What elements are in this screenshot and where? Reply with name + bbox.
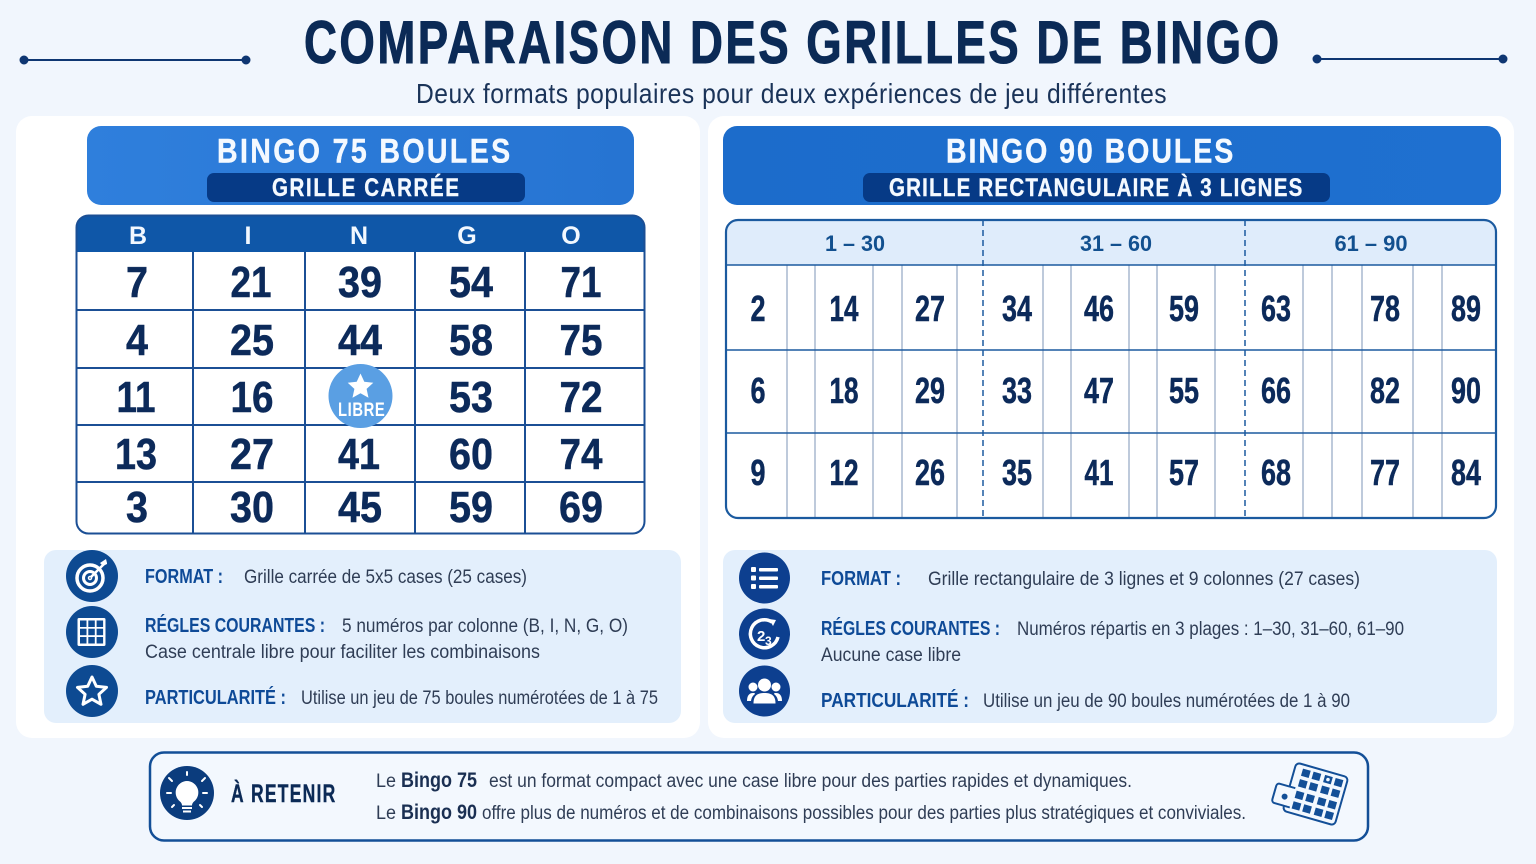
bingo 90 grid: 84	[1451, 452, 1481, 493]
takeaway text: est un format compact avec une case libre pour des parties rapides et dynamiques.	[489, 771, 1132, 792]
bingo 75 grid: 44	[338, 316, 382, 365]
feature text: Utilise un jeu de 75 boules numérotées de 1 à 75	[301, 688, 658, 709]
subtitle: Deux formats populaires pour deux expériences de jeu différentes	[416, 78, 1167, 109]
bingo 90 grid: 63	[1261, 288, 1291, 329]
bingo 90 grid: 55	[1169, 370, 1199, 411]
rules text: RÉGLES COURANTES :	[145, 614, 325, 637]
bingo 75 grid: O	[561, 222, 581, 250]
bingo 75 grid	[76, 215, 645, 534]
header: bingo 75	[87, 126, 634, 205]
bingo 90 grid: 31 – 60	[1080, 231, 1152, 256]
bingo 90 grid: 18	[830, 370, 858, 411]
icon: people	[739, 666, 790, 716]
bingo 75 grid: 21	[230, 258, 272, 307]
free space: LIBRE	[338, 399, 385, 420]
bingo 90 grid: 26	[915, 452, 945, 493]
icon: list	[739, 552, 790, 604]
bingo 90 grid: 90	[1451, 370, 1481, 411]
bingo 75 grid: 74	[560, 430, 603, 479]
rules text: RÉGLES COURANTES :	[821, 617, 1000, 640]
bingo 75 grid: 30	[230, 483, 274, 532]
bingo 75 grid: 41	[338, 430, 380, 479]
takeaway text: Bingo 90	[401, 801, 477, 824]
panel: bingo 90	[708, 116, 1514, 738]
bingo 90 grid: 14	[830, 288, 858, 329]
bingo 90 grid: 78	[1370, 288, 1400, 329]
bingo 75 grid: 54	[449, 258, 493, 307]
rules text: Case centrale libre pour faciliter les combinaisons	[145, 642, 540, 663]
panel: bingo 75	[16, 116, 700, 738]
bingo 75 grid: 4	[126, 316, 148, 365]
bingo 75 grid: 60	[449, 430, 493, 479]
bingo 90 grid	[726, 220, 1496, 518]
icon: rotating numbers: 2	[757, 628, 765, 645]
bingo 90 grid: 77	[1370, 452, 1400, 493]
bingo 75 grid: 39	[338, 258, 382, 307]
bingo 90 grid: 61 – 90	[1334, 231, 1408, 256]
rules text: 5 numéros par colonne (B, I, N, G, O)	[342, 616, 628, 637]
bingo 75 grid: N	[350, 222, 368, 250]
takeaway text	[376, 769, 1246, 824]
rules text	[145, 614, 628, 663]
bingo 90 grid: 47	[1084, 370, 1114, 411]
bingo 75 grid: G	[457, 222, 477, 250]
bingo 75 grid: 59	[449, 483, 493, 532]
takeaway text: Bingo 75	[401, 769, 477, 792]
bingo 90 grid: 89	[1451, 288, 1481, 329]
bingo 90 grid: 2	[750, 288, 766, 329]
header: bingo 75: GRILLE CARRÉE	[272, 173, 459, 201]
bingo 90 grid: 41	[1084, 452, 1114, 493]
takeaway text: offre plus de numéros et de combinaisons possibles pour des parties plus stratégiques et conviviales.	[482, 803, 1246, 824]
bingo 90 grid: 59	[1169, 288, 1199, 329]
format text: FORMAT :	[821, 568, 901, 590]
bingo 75 grid: 69	[559, 483, 603, 532]
header: bingo 90	[723, 126, 1501, 205]
bingo 90 grid: 66	[1261, 370, 1291, 411]
bingo 75 grid: 27	[230, 430, 274, 479]
icon: bingo ticket	[1270, 759, 1348, 825]
left title rule	[20, 56, 250, 64]
rules text: Numéros répartis en 3 plages : 1–30, 31–60, 61–90	[1017, 619, 1404, 640]
bingo 75 grid: B	[129, 222, 147, 250]
bingo 75 grid: 58	[449, 316, 493, 365]
bingo 75 grid: 16	[230, 373, 274, 422]
feature text	[821, 689, 1350, 712]
rules text: Aucune case libre	[821, 645, 961, 666]
format text	[145, 566, 527, 588]
bingo 90 grid: 46	[1084, 288, 1114, 329]
format text: Grille carrée de 5x5 cases (25 cases)	[244, 567, 527, 588]
bingo 90 grid: 12	[830, 452, 858, 493]
bingo 90 grid: 9	[750, 452, 766, 493]
icon: target	[66, 550, 118, 602]
feature text	[145, 686, 658, 709]
bingo 90 grid: 33	[1002, 370, 1032, 411]
header: bingo 90: GRILLE RECTANGULAIRE À 3 LIGNES	[889, 173, 1302, 201]
feature text: PARTICULARITÉ :	[821, 689, 969, 712]
icon: rotating numbers	[739, 608, 790, 660]
bingo 75 grid: 25	[230, 316, 274, 365]
bingo 75 grid: I	[245, 222, 251, 250]
icon: light bulb	[160, 766, 214, 820]
rules text	[821, 617, 1404, 666]
bingo 90 grid: 57	[1169, 452, 1199, 493]
bingo 75 grid: 3	[126, 483, 148, 532]
right title rule	[1313, 55, 1507, 63]
header: bingo 75: BINGO 75 BOULES	[217, 132, 510, 170]
bingo 90 grid: 82	[1370, 370, 1400, 411]
format text: Grille rectangulaire de 3 lignes et 9 colonnes (27 cases)	[928, 569, 1360, 590]
bingo 90 grid: 68	[1261, 452, 1291, 493]
bingo 90 grid: 27	[915, 288, 945, 329]
bingo 75 grid: 7	[126, 258, 148, 307]
bingo 90 grid: 6	[750, 370, 766, 411]
bingo 90 grid: 1 – 30	[825, 231, 885, 256]
free space	[328, 364, 392, 428]
bingo 90 grid: 35	[1002, 452, 1032, 493]
bingo 90 grid: 34	[1002, 288, 1032, 329]
title: COMPARAISON DES GRILLES DE BINGO	[304, 10, 1279, 77]
bingo 75 grid: 13	[115, 430, 157, 479]
takeaway text: Le	[376, 771, 396, 792]
label: À RETENIR	[231, 779, 336, 808]
bingo 75 grid: 72	[560, 373, 602, 422]
info: bingo 75	[44, 550, 681, 723]
bingo 75 grid: 45	[338, 483, 382, 532]
format text: FORMAT :	[145, 566, 223, 588]
bingo 75 grid: 75	[560, 316, 602, 365]
icon: star	[66, 665, 118, 717]
feature text: PARTICULARITÉ :	[145, 686, 286, 709]
bingo 75 grid: 11	[116, 373, 156, 422]
icon: rotating numbers: 3	[765, 634, 772, 648]
feature text: Utilise un jeu de 90 boules numérotées de 1 à 90	[983, 691, 1350, 712]
bingo 75 grid: 71	[560, 258, 602, 307]
bingo 75 grid: 53	[449, 373, 493, 422]
header: bingo 90: BINGO 90 BOULES	[946, 132, 1233, 170]
bingo 90 grid: 29	[915, 370, 945, 411]
icon: grid	[66, 606, 118, 658]
callout: à retenir	[150, 752, 1368, 840]
info: bingo 90	[723, 550, 1497, 723]
takeaway text: Le	[376, 803, 396, 824]
